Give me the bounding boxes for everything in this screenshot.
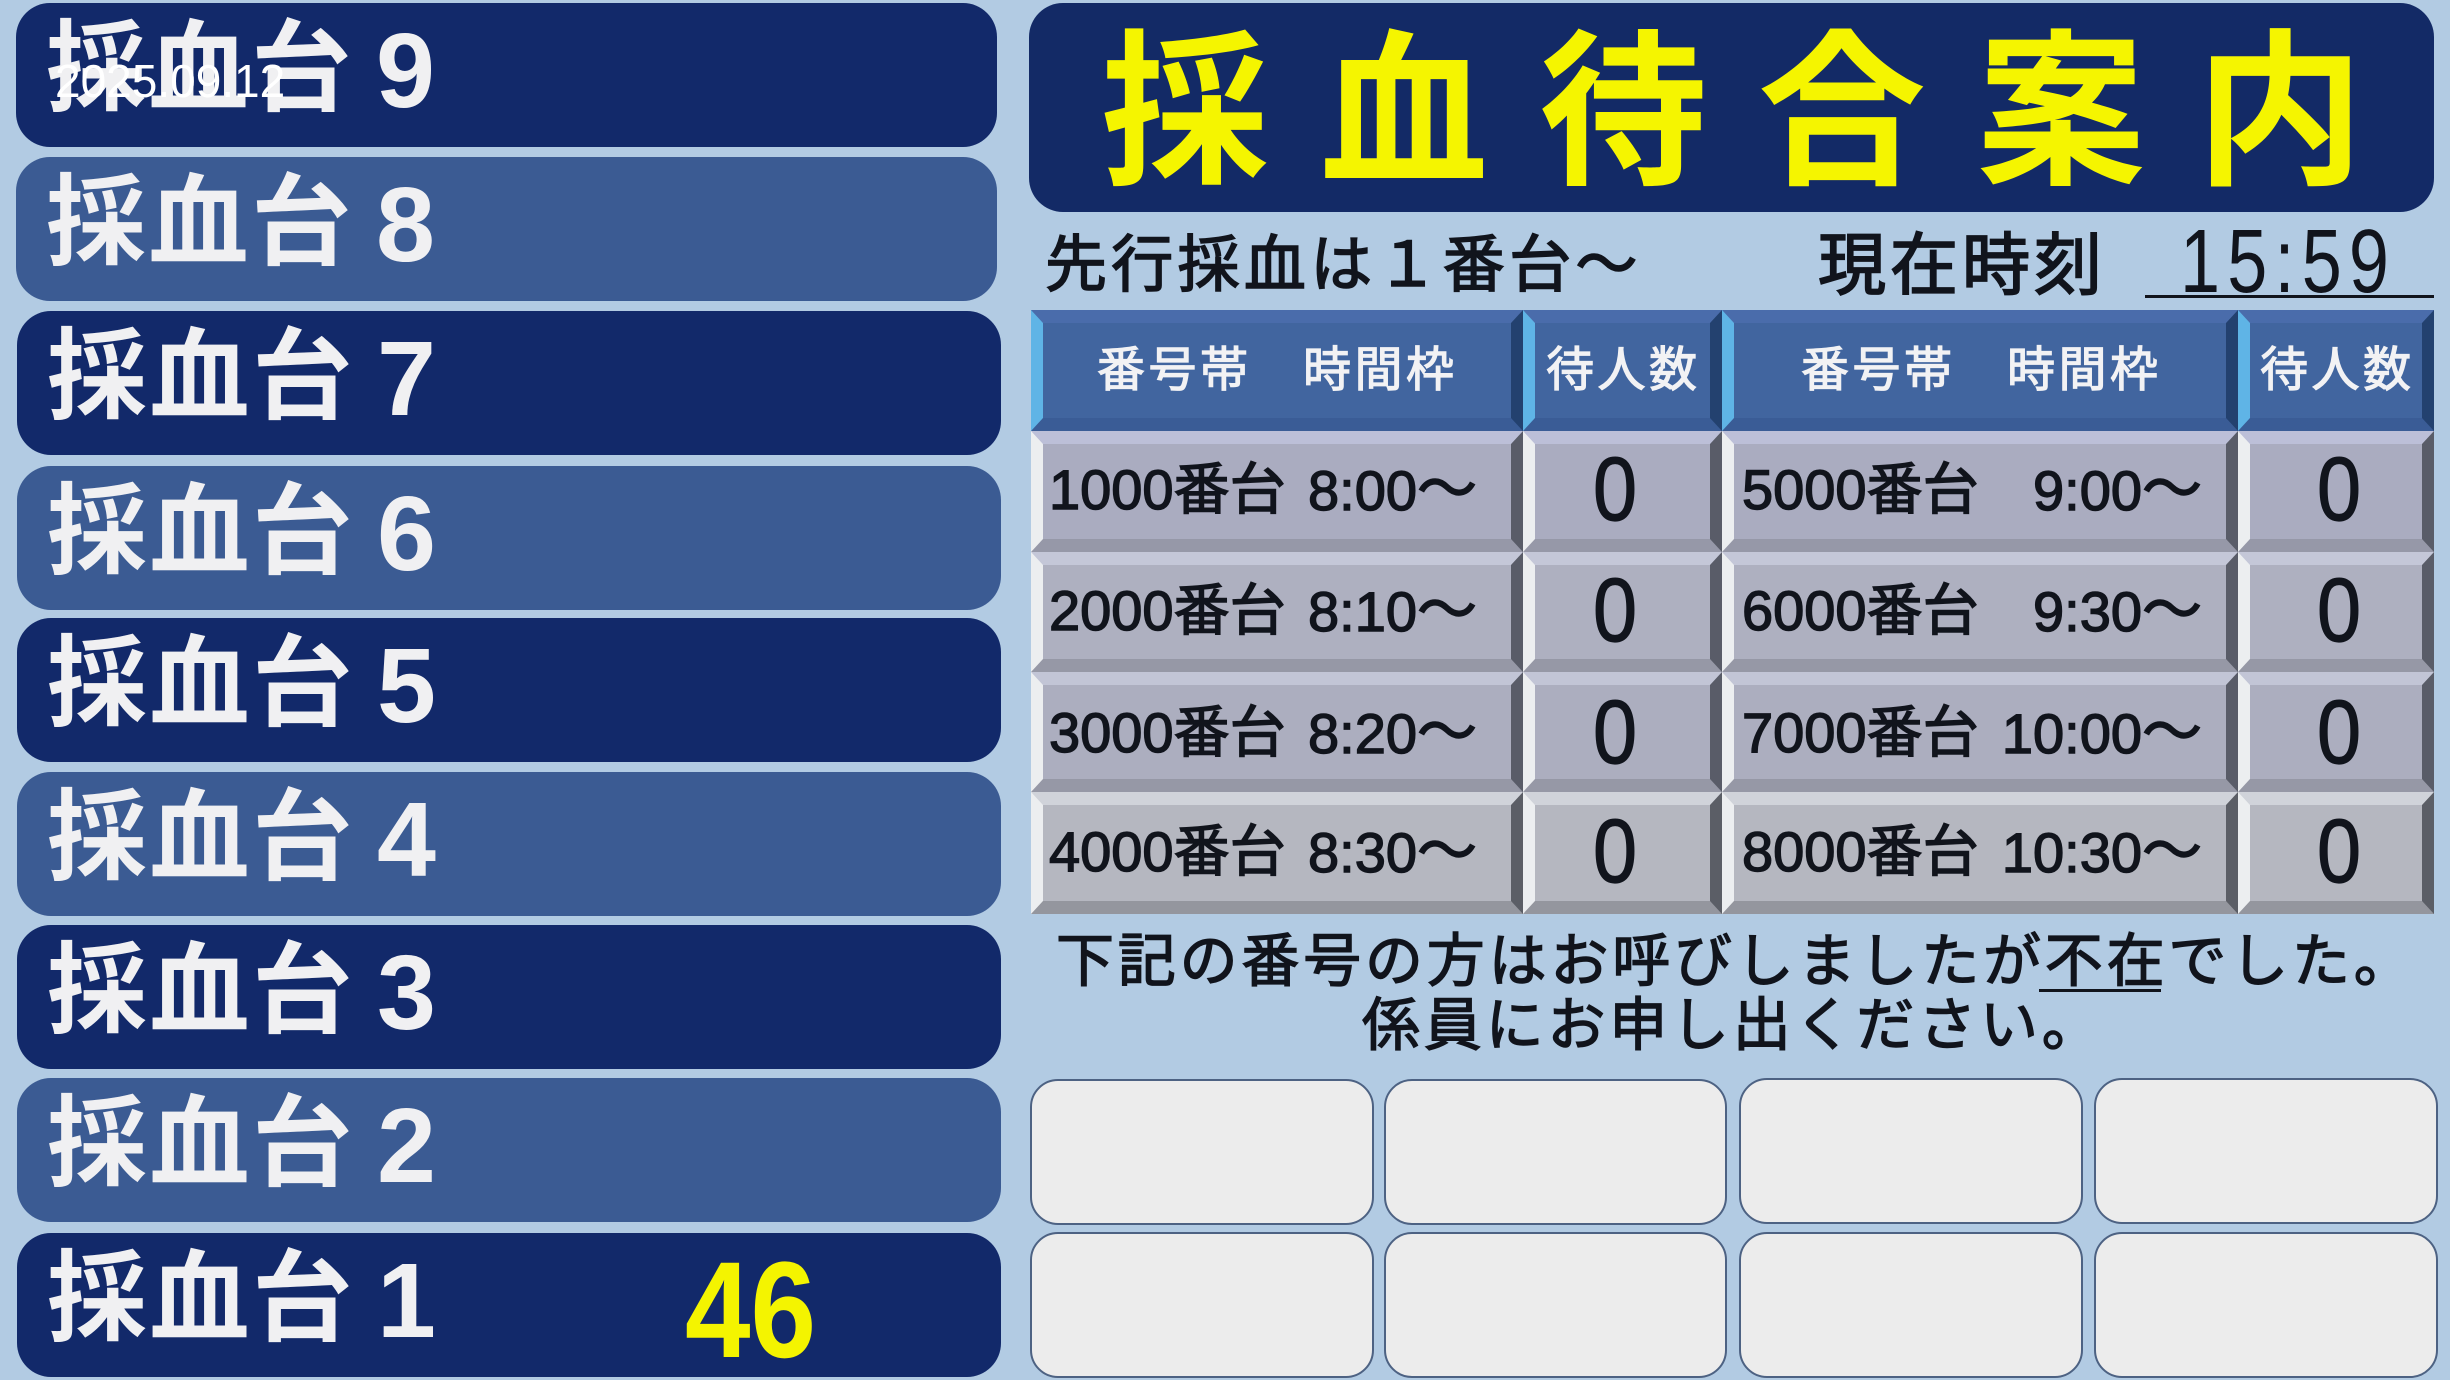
bar: station 7 (17, 311, 1001, 455)
bar: station 1 with called number: 1 (377, 1242, 436, 1360)
row: 8000 band: 10:30～ (2002, 818, 2202, 885)
row: 6000 band: 6000番台 (1742, 579, 1979, 642)
row: 2000 band: 8:10～ (1308, 577, 1477, 644)
header: number band and time slot, left (1031, 310, 1523, 431)
row: 7000 band: 7000番台 (1742, 701, 1979, 764)
count: 7000 band: 0 (2317, 683, 2361, 783)
empty number box r2c2 (1384, 1232, 1727, 1378)
bar: station 2 (17, 1078, 1001, 1222)
empty number box r1c4 (2094, 1078, 2438, 1224)
bar: station 4 (17, 772, 1001, 916)
bar: station 9 (16, 3, 997, 147)
bar: station 4: 採血台 (47, 782, 354, 894)
row: 4000 band (1031, 792, 1523, 914)
bar: station 6 (17, 466, 1001, 610)
bar: station 8 (16, 157, 997, 301)
row: 6000 band: 9:30～ (2033, 577, 2202, 644)
empty number box r2c1 (1030, 1232, 1374, 1378)
absent notice text: 下記の番号の方はお呼びしましたが不在でした。 (1056, 929, 2416, 994)
count: 8000 band: 0 (2317, 802, 2361, 902)
count: 5000 band: 0 (2317, 440, 2361, 540)
header: waiting count, right: 待人数 (2260, 344, 2415, 397)
notice: priority draw: 先行採血は１番台～ (1045, 231, 1642, 300)
current time label: 現在時刻 (1818, 228, 2106, 304)
background panel: station list (16, 3, 1001, 1380)
row: 2000 band (1031, 552, 1523, 672)
empty number box r1c2 (1384, 1079, 1727, 1225)
bar: station 2: 2 (377, 1087, 436, 1205)
row: 8000 band: 8000番台 (1742, 820, 1979, 883)
row: 3000 band: 3000番台 (1049, 701, 1286, 764)
row: 2000 band: 2000番台 (1049, 579, 1286, 642)
bar: station 8: 採血台 (46, 167, 354, 279)
bar: station 6: 6 (377, 475, 436, 593)
count: 4000 band (1523, 792, 1722, 914)
row: 4000 band: 8:30～ (1308, 818, 1477, 885)
row: 3000 band: 8:20～ (1308, 699, 1477, 766)
bar: station 5: 5 (377, 627, 436, 745)
bar: station 7: 採血台 (47, 321, 354, 433)
empty number box r1c1 (1030, 1079, 1374, 1225)
row: 7000 band (1722, 672, 2238, 792)
count: 4000 band: 0 (1593, 802, 1637, 902)
bar: station 2: 採血台 (47, 1088, 354, 1200)
header: number band and time slot, left: 番号帯 時間枠 (1097, 344, 1458, 397)
count: 7000 band (2238, 672, 2434, 792)
bar: station 5 (17, 618, 1001, 762)
absent notice text: 係員にお申し出ください。 (1362, 993, 2104, 1058)
title text: 採血待合案内 (1101, 19, 2415, 207)
row: 7000 band: 10:00～ (2002, 699, 2202, 766)
bar: station 5: 採血台 (47, 628, 354, 740)
absent number grid (1030, 1078, 2438, 1378)
title panel (1029, 3, 2434, 212)
header: number band and time slot, right (1722, 310, 2238, 431)
bar: station 4: 4 (377, 781, 436, 899)
current time value: 15:59 (2180, 212, 2396, 312)
header: waiting count, right (2238, 310, 2434, 431)
bar: station 3 (17, 925, 1001, 1069)
waiting table (1031, 310, 2434, 914)
row: 1000 band: 1000番台 (1049, 458, 1286, 521)
bar: station 9: 9 (376, 12, 435, 130)
date stamp: 2025.09.12 (55, 55, 285, 107)
bar: station 8: 8 (376, 166, 435, 284)
header: waiting count, left: 待人数 (1546, 344, 1701, 397)
absent notice text (1056, 929, 2416, 1058)
header: number band and time slot, right: 番号帯 時間枠 (1801, 344, 2162, 397)
count: 8000 band (2238, 792, 2434, 914)
row: 5000 band (1722, 431, 2238, 552)
bar: station 1 with called number: 採血台 (47, 1243, 354, 1355)
bar: station 3: 3 (377, 934, 436, 1052)
count: 3000 band (1523, 672, 1722, 792)
bar: station 7: 7 (377, 320, 436, 438)
row: 5000 band: 5000番台 (1742, 458, 1979, 521)
count: 1000 band (1523, 431, 1722, 552)
count: 6000 band (2238, 552, 2434, 672)
empty number box r2c4 (2094, 1232, 2438, 1378)
count: 6000 band: 0 (2317, 561, 2361, 661)
bar: station 1 with called number (17, 1233, 1001, 1377)
row: 3000 band (1031, 672, 1523, 792)
bar: station 6: 採血台 (47, 476, 354, 588)
count: 2000 band (1523, 552, 1722, 672)
current time value (2145, 216, 2434, 298)
row: 6000 band (1722, 552, 2238, 672)
row: 4000 band: 4000番台 (1049, 820, 1286, 883)
bar: station 3: 採血台 (47, 935, 354, 1047)
empty number box r2c3 (1739, 1232, 2083, 1378)
count: 5000 band (2238, 431, 2434, 552)
count: 1000 band: 0 (1593, 440, 1637, 540)
count: 2000 band: 0 (1593, 561, 1637, 661)
bar: station 9: 採血台 (46, 13, 354, 125)
row: 1000 band (1031, 431, 1523, 552)
count: 3000 band: 0 (1593, 683, 1637, 783)
row: 8000 band (1722, 792, 2238, 914)
empty number box r1c3 (1739, 1078, 2083, 1224)
header: waiting count, left (1523, 310, 1722, 431)
row: 5000 band: 9:00～ (2033, 456, 2202, 523)
row: 1000 band: 8:00～ (1308, 456, 1477, 523)
